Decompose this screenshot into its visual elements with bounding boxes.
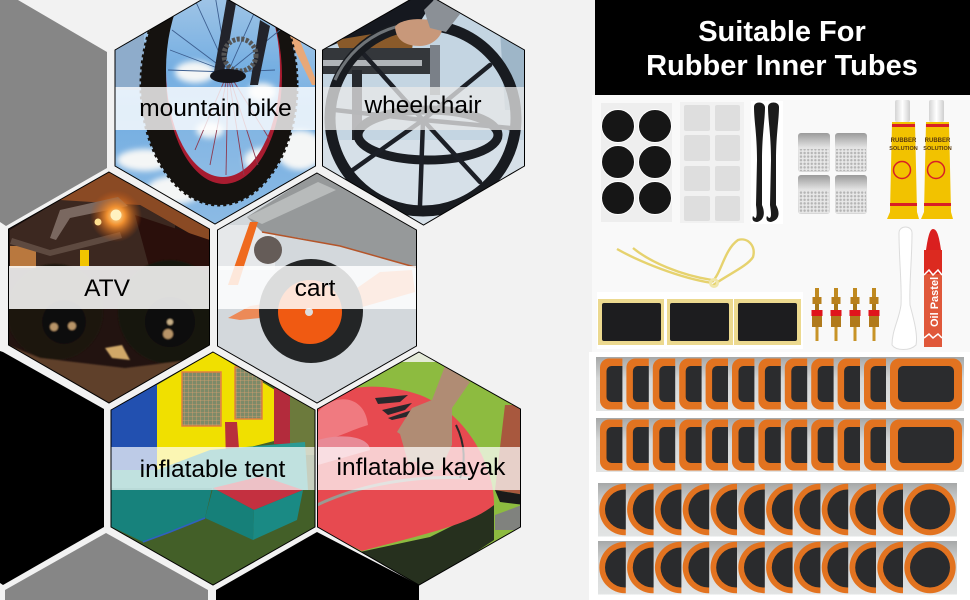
item: tire levers [751,101,783,224]
panel: inflatable kayak hexagon [315,350,525,590]
item: rubber solution tube 2 [921,100,953,219]
panel: repair patches background [589,352,970,600]
item: round black patches [601,103,672,222]
heading banner: Rubber Inner Tubes [646,50,918,82]
panel: ATV hexagon [5,170,222,410]
decorative hexagon: black bottom [216,532,419,600]
decorative hexagon: black left [0,351,104,585]
item: gold-edged black patches [597,292,803,349]
item: yellow rubber cord [617,239,754,286]
item: clear square patches [680,102,744,223]
heading banner [595,0,970,95]
item: oil pastel crayon [924,229,942,347]
patches: round row 1 [598,483,957,536]
panel: kit background [592,95,970,352]
decorative hexagon: grey top left [0,0,107,226]
item: rubber solution tube 1 [887,100,919,219]
label: inflatable tent: inflatable tent [140,456,286,483]
item: valve cores [812,288,880,341]
panel: inflatable tent hexagon [108,350,318,590]
item: rubber solution tube 1: RUBBER [891,138,917,144]
panel: wheelchair hexagon [320,0,530,230]
label: cart: cart [295,275,336,302]
label: mountain bike: mountain bike [139,95,292,122]
label: inflatable kayak: inflatable kayak [337,454,506,481]
patches: rectangular row 1 [596,357,964,411]
heading banner: Suitable For [698,16,866,48]
item: oil pastel crayon: Oil Pastel [929,277,941,327]
panel: cart hexagon [215,170,420,406]
label: wheelchair: wheelchair [363,92,482,119]
decorative hexagon: grey bottom [5,533,208,600]
item: rubber solution tube 2: RUBBER [925,138,951,144]
panel: mountain bike hexagon [110,0,324,230]
patches: rectangular row 2 [596,418,964,472]
item: silver patches [798,133,867,214]
label: ATV: ATV [84,275,131,302]
item: rubber solution tube 2: SOLUTION [923,146,952,152]
item: white spatula [892,227,917,350]
item: rubber solution tube 1: SOLUTION [889,146,918,152]
patches: round row 2 [598,541,957,594]
